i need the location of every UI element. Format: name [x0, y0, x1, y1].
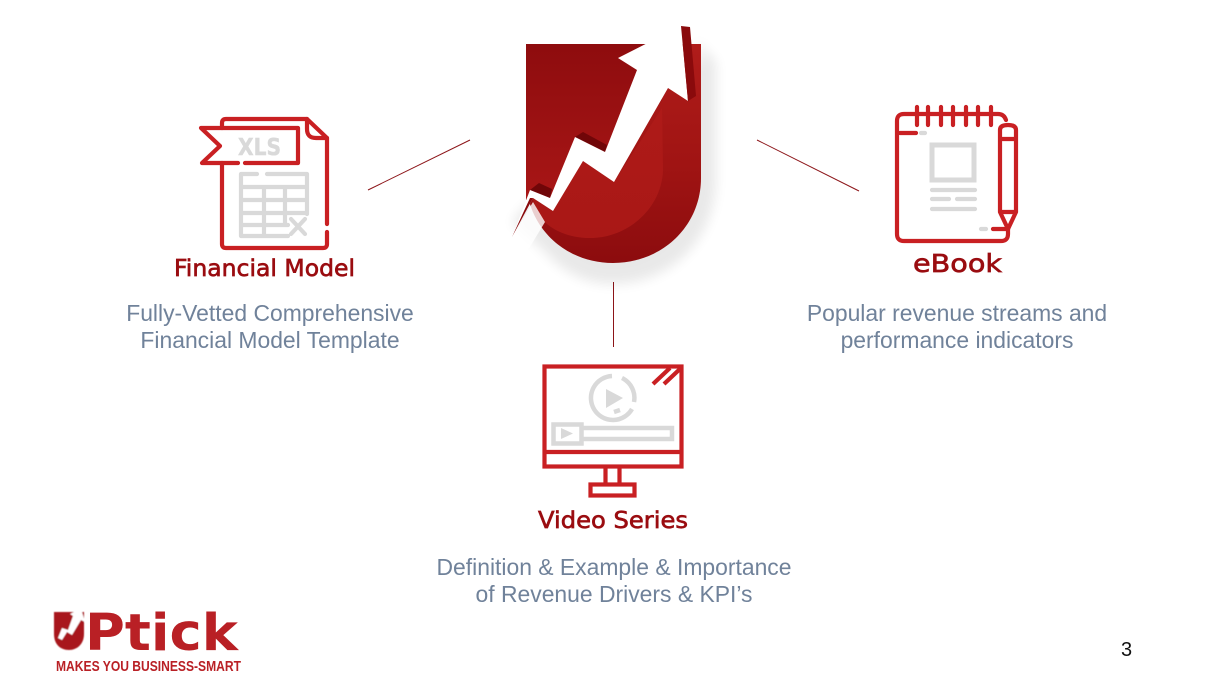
text: video series description: of Revenue Drivers & KPI’s — [476, 581, 752, 607]
text: ebook description — [807, 300, 1107, 353]
icon: XLS spreadsheet file — [201, 119, 327, 248]
label: XLS: XLS — [238, 135, 281, 161]
central logo: U with rising arrow — [512, 26, 716, 284]
text: video series description — [437, 554, 791, 607]
text: financial model description — [126, 300, 414, 353]
connector: right — [757, 140, 859, 191]
text: financial model description: Fully-Vetted Comprehensive — [126, 300, 414, 326]
icon: notebook with pencil — [897, 107, 1016, 241]
logo: UPtick — [52, 604, 241, 675]
table — [241, 174, 307, 236]
text: ebook description: performance indicators — [841, 327, 1073, 353]
text: financial model description: Financial Model Template — [140, 327, 400, 353]
heading: Video Series: Video Series — [538, 508, 688, 534]
heading: Financial Model: Financial Model — [174, 256, 355, 282]
wordmark: Ptick — [85, 604, 239, 663]
tagline: MAKES YOU BUSINESS-SMART — [56, 658, 241, 675]
page number: 3 — [1121, 639, 1132, 661]
heading: eBook: eBook — [913, 249, 1003, 278]
connector: left — [368, 140, 470, 190]
text: video series description: Definition & Example & Importance — [437, 554, 791, 580]
text: ebook description: Popular revenue streams and — [807, 300, 1107, 326]
connector: bottom — [612, 282, 614, 347]
logo mark — [52, 608, 85, 650]
icon: video monitor — [544, 366, 682, 496]
